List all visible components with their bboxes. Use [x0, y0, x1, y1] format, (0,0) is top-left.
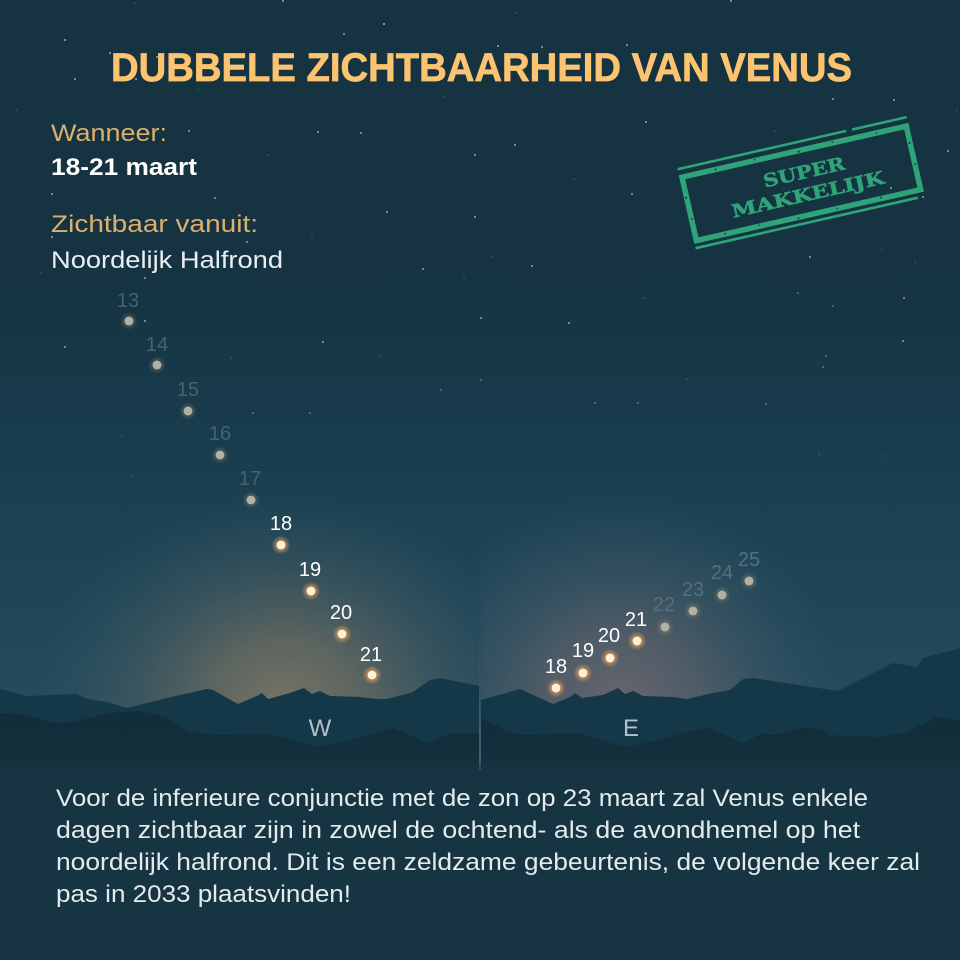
- mountains: west back ridge: [0, 678, 479, 770]
- venus 20 march east: [598, 625, 620, 668]
- info block: when: 18-21 maart: [51, 154, 197, 181]
- venus 15 march: 15: [177, 379, 199, 401]
- venus 24 march east: 24: [711, 562, 733, 584]
- venus 23 march east: [682, 579, 704, 620]
- mountains: west front ridge: [0, 711, 479, 770]
- venus 13 march: [117, 290, 139, 330]
- venus 18 march: [270, 513, 292, 554]
- description text: dagen zichtbaar zijn in zowel de ochtend- als de avondhemel op het: [56, 817, 860, 844]
- title: DUBBELE ZICHTBAARHEID VAN VENUS: [111, 46, 852, 90]
- venus 21 march: 21: [360, 644, 382, 666]
- stamp: super makkelijk: MAKKELIJK: [730, 167, 888, 223]
- venus 17 march: [239, 468, 261, 509]
- venus 15 march: [177, 379, 199, 420]
- stamp: super makkelijk: [677, 116, 925, 249]
- venus 18 march east: [545, 656, 567, 698]
- venus 25 march east: [738, 549, 760, 590]
- venus 14 march: [146, 334, 168, 374]
- mountains: east front ridge: [481, 717, 960, 770]
- direction label: east: E: [623, 715, 639, 742]
- venus 20 march: 20: [330, 602, 352, 624]
- venus 14 march: 14: [146, 334, 168, 356]
- venus 21 march east: [625, 609, 647, 650]
- venus 22 march east: [653, 594, 675, 636]
- description text: pas in 2033 plaatsvinden!: [56, 881, 351, 908]
- venus 18 march: 18: [270, 513, 292, 535]
- description text: [56, 785, 920, 908]
- info block: visible from: Noordelijk Halfrond: [51, 247, 283, 274]
- description text: noordelijk halfrond. Dit is een zeldzame gebeurtenis, de volgende keer zal: [56, 849, 920, 876]
- horizon glow: east: [481, 528, 794, 704]
- info block: when: [51, 120, 197, 181]
- horizon glow: west: [84, 525, 480, 730]
- venus 18 march east: 18: [545, 656, 567, 678]
- description text: Voor de inferieure conjunctie met de zon op 23 maart zal Venus enkele: [56, 785, 868, 812]
- venus 23 march east: 23: [682, 579, 704, 601]
- venus 16 march: 16: [209, 423, 231, 445]
- venus 20 march east: 20: [598, 625, 620, 647]
- venus 19 march east: [572, 640, 594, 682]
- venus 21 march: [360, 644, 382, 684]
- info block: visible from: [51, 211, 283, 274]
- east venus positions: [545, 549, 760, 698]
- venus 13 march: 13: [117, 290, 139, 312]
- stars: [16, 0, 958, 477]
- panel divider: [480, 540, 481, 762]
- venus 20 march: [330, 602, 352, 644]
- west venus positions: [117, 290, 382, 684]
- venus 17 march: 17: [239, 468, 261, 490]
- venus 21 march east: 21: [625, 609, 647, 631]
- direction label: west: W: [309, 715, 332, 742]
- venus 24 march east: [711, 562, 733, 604]
- venus 16 march: [209, 423, 231, 464]
- venus 19 march east: 19: [572, 640, 594, 662]
- venus 25 march east: 25: [738, 549, 760, 571]
- info block: when: Wanneer:: [51, 120, 167, 147]
- venus 19 march: 19: [299, 559, 321, 581]
- venus 19 march: [299, 559, 321, 600]
- mountains: east back ridge: [481, 648, 960, 770]
- venus 22 march east: 22: [653, 594, 675, 616]
- info block: visible from: Zichtbaar vanuit:: [51, 211, 258, 238]
- stamp: super makkelijk: SUPER: [761, 153, 848, 192]
